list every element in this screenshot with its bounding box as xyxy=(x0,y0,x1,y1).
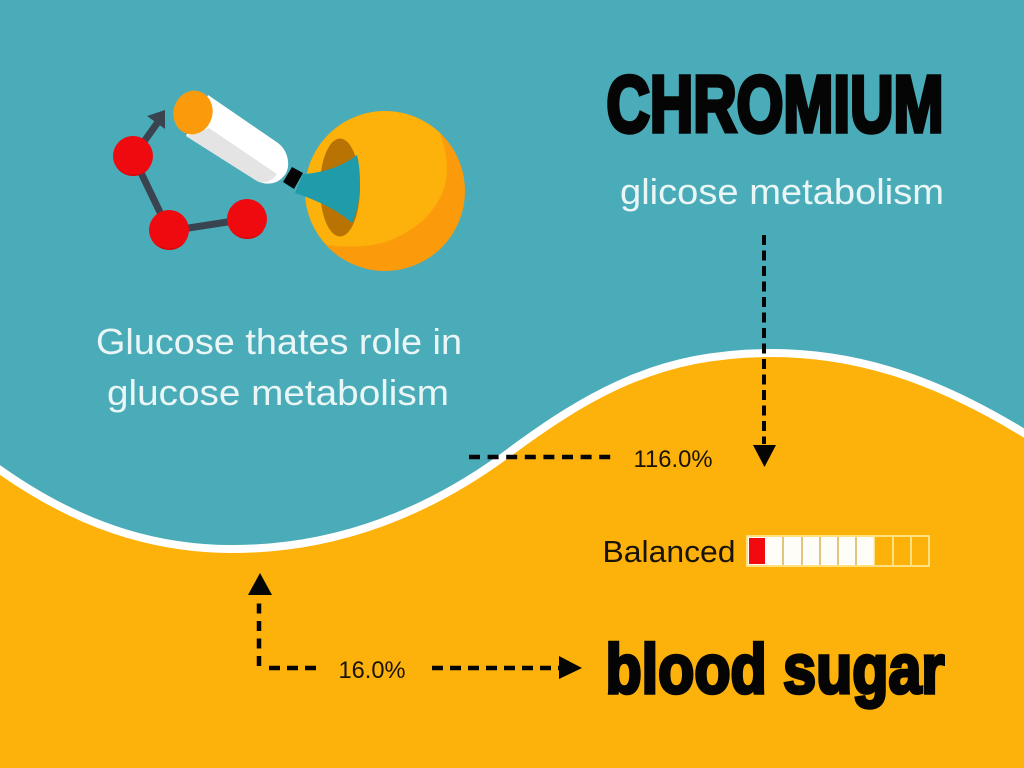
icon: capsule xyxy=(168,86,303,189)
arrow: down to 116.0% xyxy=(753,235,776,467)
label: 116.0%: 116.0% xyxy=(634,446,712,473)
text block: glucose role: Glucose thates role in xyxy=(96,321,462,362)
label: Balanced: Balanced xyxy=(602,534,736,569)
arrow: up to the curve xyxy=(248,573,316,668)
text block: glucose role xyxy=(96,321,462,413)
icon: molecule chain xyxy=(113,110,267,250)
label: 16.0%: 16.0% xyxy=(338,657,406,684)
icon: yellow sphere with funnel xyxy=(295,111,465,271)
gauge: balance bar xyxy=(747,536,929,566)
heading: blood sugar: blood sugar xyxy=(606,630,944,708)
arrow: to blood sugar xyxy=(432,656,582,679)
dashed line: 116.0% xyxy=(469,455,612,459)
subtitle: glicose metabolism xyxy=(620,171,944,212)
text block: glucose role: glucose metabolism xyxy=(107,372,449,413)
wave panel: yellow with white edge xyxy=(0,353,1024,768)
